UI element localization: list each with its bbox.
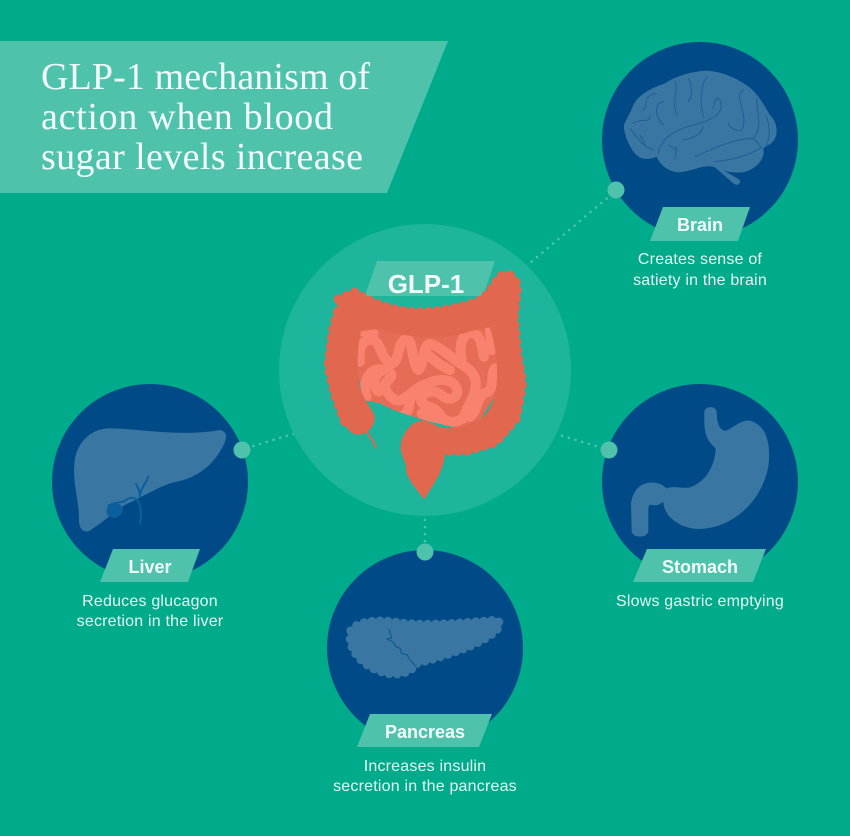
- dotted connector: GLP-1 to brain: [530, 194, 612, 263]
- title banner: action when blood: [41, 96, 333, 138]
- panel: liver: [52, 384, 250, 630]
- pancreas description: secretion in the pancreas: [333, 778, 517, 795]
- brain node: [608, 182, 624, 198]
- icon: intestines: [328, 275, 522, 497]
- stomach label: Stomach: [662, 557, 738, 577]
- dotted connector: GLP-1 to liver: [240, 433, 296, 450]
- stomach label: [633, 549, 766, 582]
- liver description: secretion in the liver: [77, 613, 224, 630]
- brain description: [633, 251, 767, 289]
- dotted connector: GLP-1 to pancreas: [424, 516, 426, 548]
- brain description: satiety in the brain: [633, 272, 767, 289]
- panel: brain: [602, 42, 798, 289]
- brain label: [650, 207, 750, 241]
- pancreas circle: [327, 550, 523, 746]
- icon: stomach: [631, 407, 769, 537]
- icon: brain: [624, 71, 777, 185]
- icon: pancreas: [350, 620, 500, 674]
- pancreas description: Increases insulin: [364, 758, 486, 775]
- GLP-1 label: GLP-1: [388, 269, 464, 299]
- stomach node: [600, 442, 618, 458]
- title banner: GLP-1 mechanism of: [41, 56, 370, 98]
- brain label: Brain: [677, 215, 723, 235]
- liver circle: [52, 384, 248, 580]
- stomach description: Slows gastric emptying: [616, 593, 784, 610]
- pancreas description: [333, 758, 517, 795]
- pancreas node: [416, 544, 434, 560]
- large intestine: [328, 275, 522, 497]
- gallbladder and ducts: [104, 477, 148, 523]
- brain circle: [602, 42, 798, 238]
- pancreas label: Pancreas: [385, 722, 465, 742]
- dotted connector: GLP-1 to stomach: [556, 434, 609, 450]
- small intestine: [358, 328, 498, 428]
- pancreas label: [357, 714, 492, 747]
- icon: liver: [74, 428, 226, 531]
- panel: pancreas: [327, 544, 523, 795]
- title banner: [0, 41, 448, 193]
- liver node: [234, 442, 250, 458]
- liver description: [77, 593, 224, 630]
- liver description: Reduces glucagon: [82, 593, 218, 610]
- liver label: [100, 549, 200, 582]
- central GLP-1 circle: [279, 224, 571, 516]
- panel: stomach: [600, 384, 798, 610]
- stomach circle: [602, 384, 798, 580]
- GLP-1 label: [365, 261, 495, 299]
- title banner: sugar levels increase: [41, 136, 363, 178]
- brain description: Creates sense of: [638, 251, 762, 268]
- liver label: Liver: [128, 557, 172, 577]
